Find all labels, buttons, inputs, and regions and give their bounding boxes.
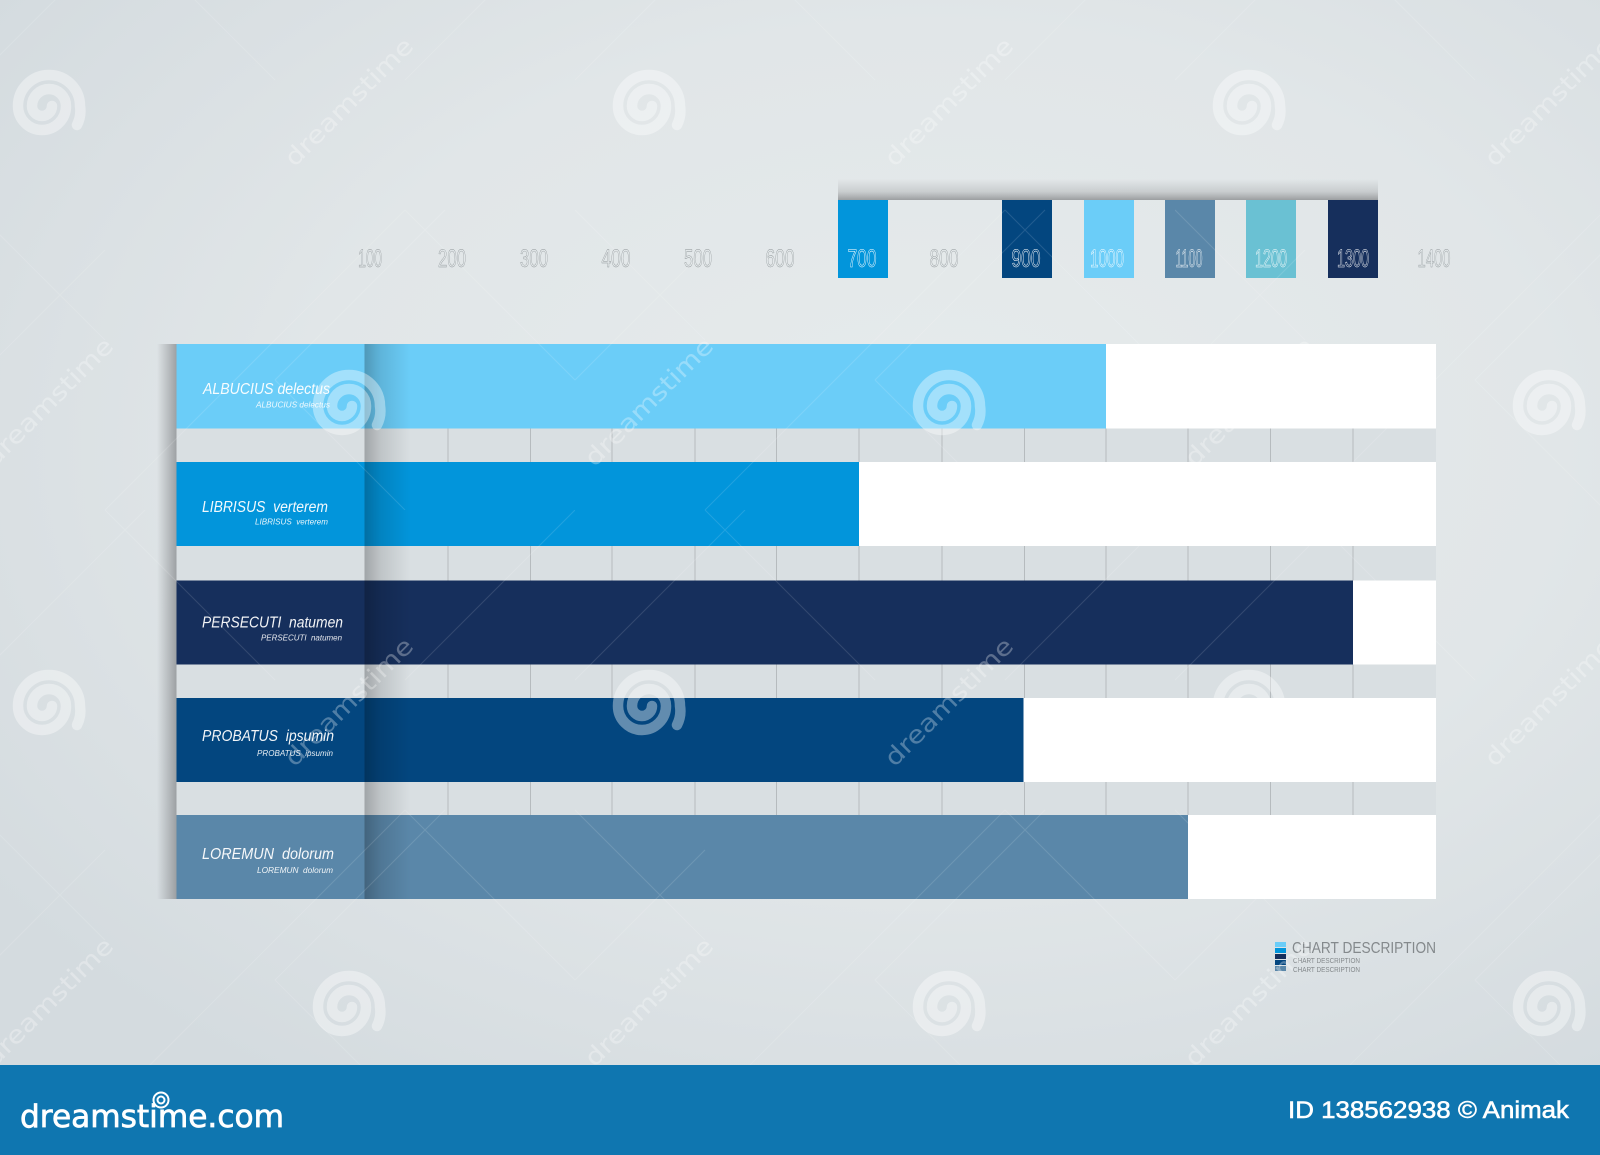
watermark text: dreamstime [279, 32, 419, 172]
footer logo spiral [154, 1092, 168, 1108]
row: PROBATUS: PROBATUS ipsumin [257, 748, 333, 758]
axis numbers: 200 [438, 245, 466, 273]
legend: chart description: CHART DESCRIPTION [1293, 956, 1360, 965]
row: PROBATUS [176, 698, 1436, 782]
axis numbers: 1000 [1090, 245, 1124, 273]
watermark text: dreamstime [279, 632, 419, 772]
row: PROBATUS: PROBATUS ipsumin [202, 728, 334, 745]
row: LOREMUN: LOREMUN dolorum [257, 865, 333, 875]
left edge shadow [157, 344, 177, 899]
watermark text: dreamstime [879, 632, 1019, 772]
swatch 1200 [1246, 200, 1296, 278]
watermark text: dreamstime [579, 332, 719, 472]
row: ALBUCIUS: ALBUCIUS delectus [255, 400, 331, 410]
axis numbers: 1400 [1418, 245, 1450, 273]
legend: chart description: CHART DESCRIPTION [1293, 965, 1360, 974]
grid lines [448, 428, 1353, 816]
swatch 1000 [1084, 200, 1134, 278]
axis numbers: 700 [848, 245, 876, 273]
grid background [176, 428, 1436, 816]
axis numbers: 1200 [1255, 245, 1287, 273]
axis numbers: 1100 [1176, 245, 1202, 273]
row: ALBUCIUS: ALBUCIUS delectus [202, 381, 330, 398]
axis numbers: 500 [684, 245, 712, 273]
axis numbers: 800 [930, 245, 958, 273]
legend icon [1275, 942, 1286, 971]
label column fold shadow [364, 344, 410, 899]
footer image id: ID 138562938 © Animak [1288, 1097, 1570, 1124]
top shadow above swatches [838, 179, 1378, 200]
row: PERSECUTI [176, 580, 1436, 664]
axis scale [358, 179, 1450, 278]
footer logo text: dreamstime.com [20, 1099, 284, 1135]
watermark text: dreamstime [1179, 932, 1319, 1072]
legend: chart description: CHART DESCRIPTION [1292, 940, 1436, 957]
bar chart [157, 344, 1436, 899]
row: LOREMUN: LOREMUN dolorum [202, 846, 334, 863]
footer bar [0, 1065, 1600, 1155]
axis numbers [358, 245, 1450, 273]
row: LIBRISUS: LIBRISUS verterem [202, 499, 328, 516]
watermark text: dreamstime [1179, 332, 1319, 472]
axis numbers: 400 [602, 245, 630, 273]
watermark text: dreamstime [579, 932, 719, 1072]
axis numbers: 100 [358, 245, 382, 273]
row: ALBUCIUS [176, 344, 1436, 428]
swatch 1100 [1165, 200, 1215, 278]
watermark text: dreamstime [1479, 32, 1600, 172]
legend: chart description [1275, 940, 1436, 974]
row: PERSECUTI: PERSECUTI natumen [261, 632, 342, 642]
swatch 900 [1002, 200, 1052, 278]
watermark text: dreamstime [879, 32, 1019, 172]
swatch 1300 [1328, 200, 1378, 278]
watermark text: dreamstime [1479, 632, 1600, 772]
row: PERSECUTI: PERSECUTI natumen [202, 614, 343, 632]
axis numbers: 900 [1012, 245, 1040, 273]
swatch 700 [838, 200, 888, 278]
row: LOREMUN [176, 815, 1436, 899]
axis numbers: 1300 [1337, 245, 1369, 273]
row: LIBRISUS [176, 462, 1436, 546]
axis numbers: 600 [766, 245, 794, 273]
axis numbers: 300 [520, 245, 548, 273]
row: LIBRISUS: LIBRISUS verterem [255, 516, 328, 526]
